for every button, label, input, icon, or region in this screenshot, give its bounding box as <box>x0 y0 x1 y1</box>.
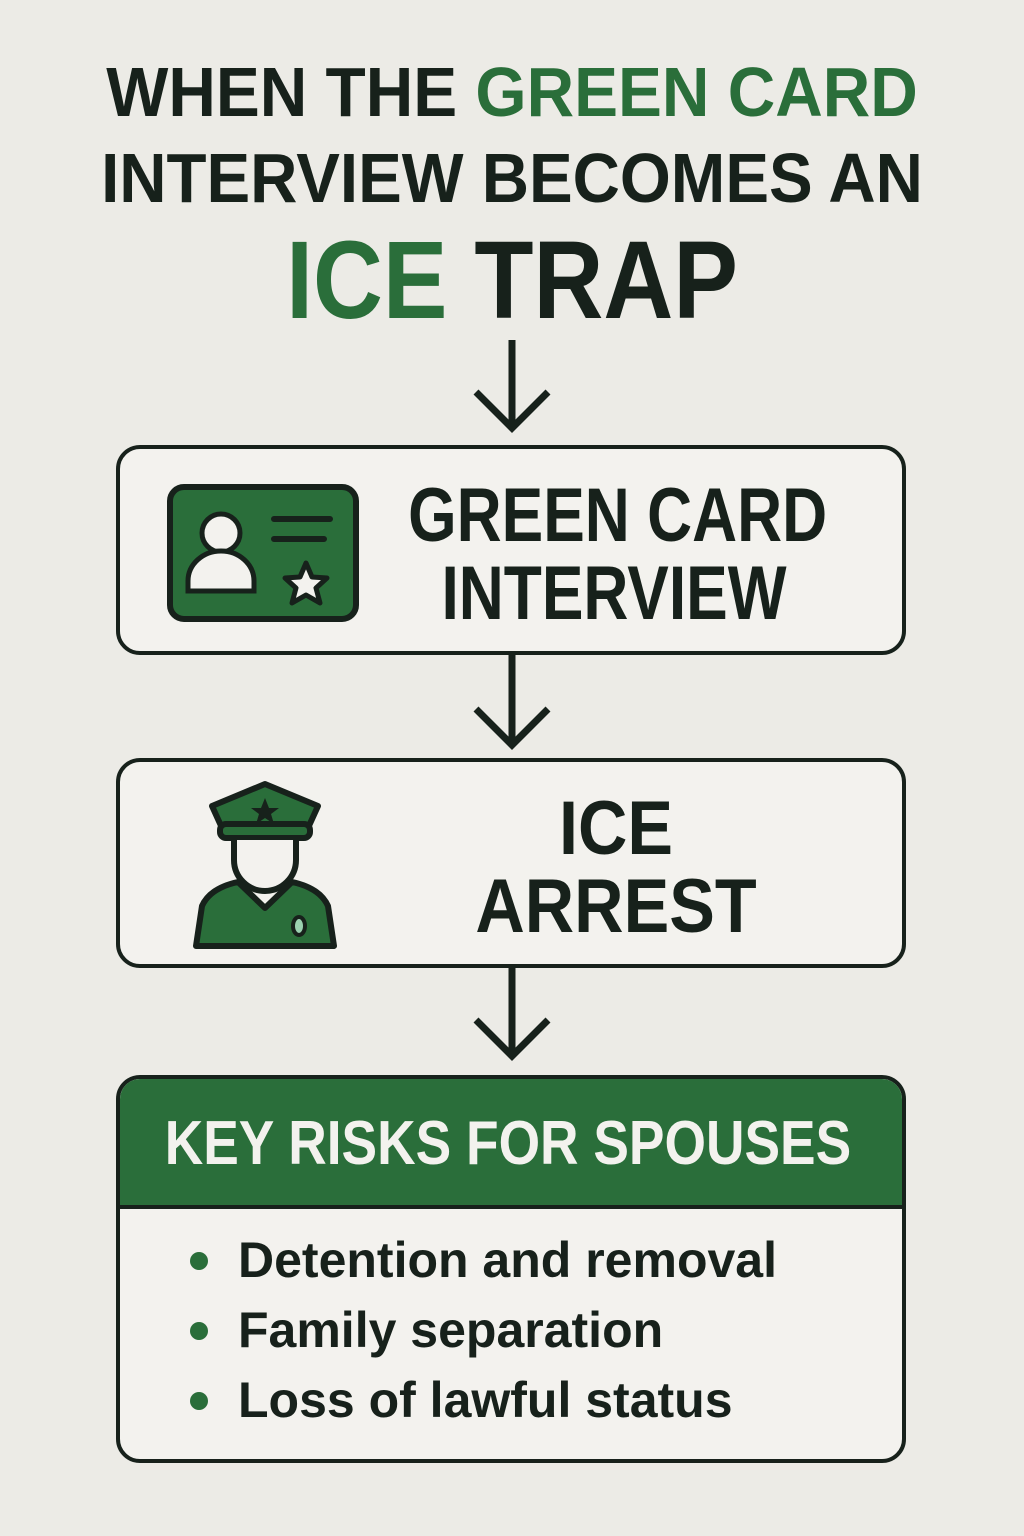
heading: green card interview: INTERVIEW <box>441 551 787 636</box>
list: risks: Family separation <box>238 1302 663 1358</box>
heading: ice arrest <box>475 786 757 949</box>
arrow 2 <box>474 655 550 750</box>
panel: green card interview <box>116 445 906 655</box>
title: INTERVIEW BECOMES AN <box>101 139 923 217</box>
title <box>101 53 923 342</box>
header: key risks for spouses: KEY RISKS FOR SPOUSES <box>165 1109 851 1178</box>
panel: key risks <box>116 1075 906 1463</box>
heading: ice arrest: ICE <box>559 786 673 871</box>
list: risks: Loss of lawful status <box>238 1372 733 1428</box>
panel: ice arrest <box>116 758 906 968</box>
title: ICE TRAP <box>286 219 738 342</box>
icon: green card <box>167 484 359 622</box>
heading: ice arrest: ARREST <box>475 864 757 949</box>
icon: officer <box>193 781 337 949</box>
heading: green card interview: GREEN CARD <box>408 473 827 558</box>
arrow 1 <box>474 340 550 433</box>
list: risks: Detention and removal <box>238 1232 777 1288</box>
list: risks <box>190 1232 777 1428</box>
arrow 3 <box>474 968 550 1061</box>
title: WHEN THE GREEN CARD <box>106 53 918 131</box>
header: key risks for spouses <box>120 1079 902 1209</box>
heading: green card interview <box>408 473 827 636</box>
